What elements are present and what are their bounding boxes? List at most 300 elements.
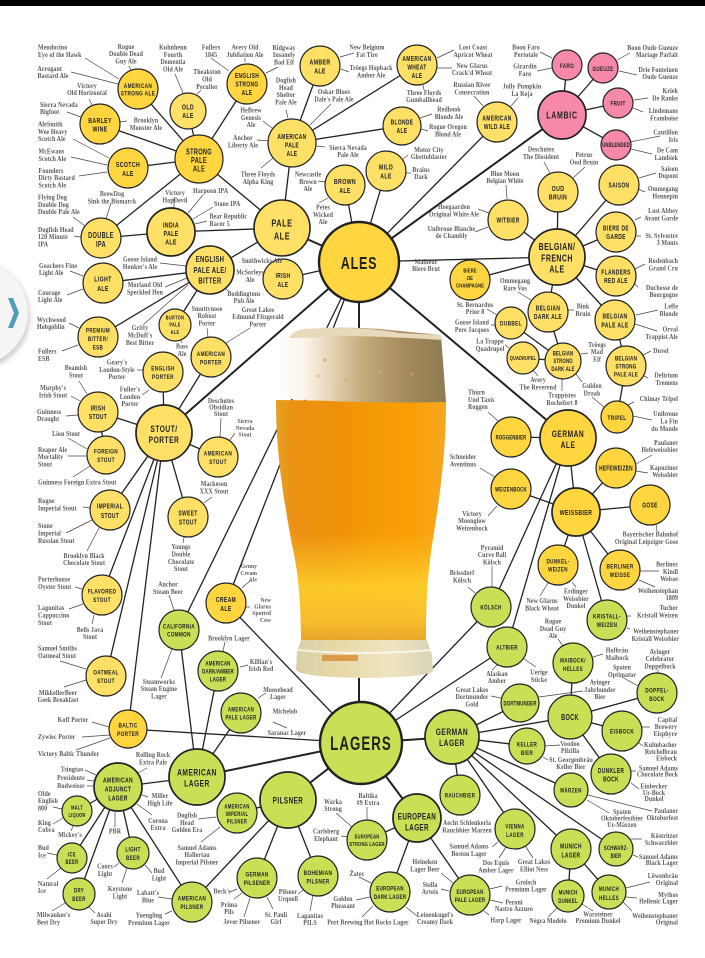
node: Belgian dark ale: DARK ALE — [534, 314, 562, 321]
beer labels: ale side upper left: Goachers Fine — [39, 263, 77, 270]
beer labels: wheat and bock right side: Gold — [466, 701, 479, 709]
node: English strong ale: ENGLISH — [235, 73, 259, 80]
node: Blonde ale: ALE — [397, 128, 407, 135]
node: Oud bruin: OUD — [552, 185, 564, 193]
node: German lager: LAGER — [439, 738, 465, 748]
node: Strong pale ale — [175, 135, 223, 183]
beer labels: lager side lower right: Mythos — [658, 892, 678, 899]
beer labels: ale side upper centre: Petes — [316, 204, 330, 212]
node: English pale ale / bitter: PALE ALE/ — [194, 265, 226, 275]
node: Unblended — [601, 130, 631, 160]
node: American dark / amber lager — [198, 651, 238, 691]
beer labels: Belgian and German ale right side: Bink — [577, 303, 590, 311]
node: Biere de champagne — [450, 260, 490, 300]
beer labels: ale side left middle: Cappuccino — [38, 612, 69, 620]
node: Foreign stout: STOUT — [97, 457, 115, 464]
node: Schwarzbier — [599, 832, 633, 866]
beer labels: ale side left middle: Morland Old — [128, 282, 163, 289]
node: Double IPA: DOUBLE — [88, 232, 114, 240]
node: Oatmeal stout: STOUT — [97, 678, 115, 685]
node: American pilsner: PILSNER — [180, 904, 204, 911]
node: Malt liquor: LIQUOR — [69, 812, 86, 819]
beer labels: Belgian and German ale right side: Blue Moon — [491, 171, 520, 178]
beer labels: ale side left middle: Oyster Stout — [38, 584, 72, 591]
beer labels: ale side left middle: Reaper Ale — [38, 447, 67, 454]
node: Hefeweizen: HEFEWEIZEN — [599, 466, 633, 473]
node: Biere de garde: BIERE DE — [603, 226, 629, 233]
beer labels: Belgian and German ale right side: Mad — [591, 349, 603, 356]
node: Oatmeal stout — [86, 656, 126, 696]
node: German ale — [540, 410, 596, 466]
beer labels: ale side upper centre: Ridgway — [272, 45, 296, 52]
beer labels: ale side upper centre: Porter — [198, 320, 216, 328]
beer labels: ale side left middle: Bass — [176, 343, 188, 351]
node: Irish stout — [78, 392, 118, 432]
beer labels: Belgian and German ale right side: Avery — [530, 377, 546, 384]
node: American pilsner — [172, 882, 212, 922]
node: German pilsener: PILSENER — [244, 880, 271, 887]
beer labels: ale side upper left: Mendocino — [38, 44, 67, 52]
beer labels: lager side lower left: Labatt's — [137, 890, 159, 897]
node: Dunkelweizen — [538, 545, 578, 585]
beer labels: ale side upper centre: HeBrew — [240, 107, 262, 115]
node: Weizenbock — [491, 469, 531, 509]
beer labels: ale side left middle: Steam Engine — [141, 686, 177, 693]
beer labels: ale side left middle: Killian's — [250, 659, 273, 666]
node: India pale ale: INDIA — [163, 222, 179, 230]
beer labels: ale side left middle: Oatmeal Stout — [38, 653, 77, 660]
node: American porter: PORTER — [200, 360, 222, 367]
beer labels: lager side lower left: Zywiec Porter — [38, 734, 75, 741]
node: Cream ale: CREAM — [216, 596, 236, 604]
node: Berliner Weisse — [600, 550, 640, 590]
beer labels: wheat and bock right side: Bier — [594, 694, 606, 701]
node: American pale lager: AMERICAN — [228, 707, 254, 714]
beer labels: ale side upper centre: Newcastle — [295, 171, 321, 179]
beer labels: ale side upper centre: Rogue Oregon — [429, 124, 467, 131]
main branch connectors — [72, 65, 657, 902]
node: Gose — [630, 485, 670, 525]
node: Sweet stout: STOUT — [179, 520, 197, 527]
node: Flanders red ale — [596, 256, 636, 296]
node: American dark / amber lager: LAGER — [210, 677, 226, 684]
beer labels: lager side lower centre: Stella — [423, 882, 438, 889]
node: Belgian dark ale: BELGIAN — [536, 306, 560, 313]
node: Imperial stout: STOUT — [101, 513, 119, 520]
node: Premium bitter / ESB — [78, 317, 118, 357]
node: American stout: AMERICAN — [204, 451, 232, 458]
beer labels: lager side lower right: Oktoberfestbier — [601, 815, 643, 823]
node: Amber ale: ALE — [314, 68, 326, 76]
beer labels: lager side lower centre: Aecht Schlenkerla — [443, 820, 492, 827]
beer labels: lager side lower right: Weihenstephaner — [632, 913, 678, 920]
beer labels: Belgian and German ale right side: Tröegs — [588, 342, 606, 349]
node: Light beer — [117, 837, 149, 869]
beer labels: Belgian and German ale right side: Orval — [663, 326, 678, 334]
node: Imperial stout: IMPERIAL — [97, 504, 123, 511]
beer labels: ale side left middle: Stone — [38, 523, 53, 530]
beer labels: ale side upper centre: Malheur — [415, 259, 437, 266]
node: Double IPA — [81, 218, 121, 258]
node: Light beer: LIGHT — [125, 847, 141, 854]
beer labels: Belgian and German ale right side: Deschutes — [528, 146, 555, 154]
beer labels: Belgian and German ale right side: Lindemans — [649, 108, 678, 115]
beer labels: lager side lower left: Keystone — [108, 886, 132, 893]
beer labels: lager side lower left: King — [38, 820, 52, 827]
node: Keller bier — [509, 728, 545, 764]
beer labels: Belgian and German ale right side: Rochefort 8 — [547, 400, 578, 407]
beer labels: lager side lower centre: Creamy Dark — [417, 919, 453, 926]
node: Altbier: ALTBIER — [496, 645, 518, 652]
node: European strong lager: STRONG LAGER — [349, 841, 385, 848]
beer labels: lager side lower left: Presidente — [57, 775, 85, 782]
beer labels: lager side lower left: PBR — [109, 828, 121, 836]
node: American dark / amber lager: AMERICAN — [205, 661, 231, 668]
node: American stout: STOUT — [209, 459, 227, 466]
beer labels: wheat and bock right side: Weihenstephaner — [633, 628, 679, 636]
beer labels: lager side lower right: Samuel Adams — [639, 854, 678, 861]
node: American strong ale: AMERICAN — [124, 83, 152, 90]
beer labels: Belgian and German ale right side: De Ranke — [652, 95, 678, 103]
node: Kolsch — [471, 587, 511, 627]
beer labels: lager side lower right: Black Lager — [646, 860, 678, 867]
beer glass photo illustration — [276, 328, 446, 678]
node: Bohemian pilsner: PILSNER — [306, 879, 330, 886]
beer labels: lager side lower right: Capital — [658, 717, 677, 724]
node: Belgian strong dark ale — [545, 343, 581, 379]
node: American imperial pilsner: IMPERIAL — [226, 811, 248, 818]
beer labels: Belgian and German ale right side: Elf — [593, 356, 602, 364]
beer labels: lager side lower right: Hellenic Lager — [639, 898, 678, 906]
beer labels: ale side upper left: Scotch Ale — [38, 156, 66, 163]
node: Mild ale: MILD — [379, 164, 393, 172]
beer labels: ale side upper left: Victory — [77, 83, 97, 90]
beer labels: wheat and bock right side: Und Taxis — [468, 397, 495, 404]
node: Irish ale — [263, 259, 303, 299]
node: Quadrupel: QUADRUPEL — [510, 355, 536, 362]
beer labels: Belgian and German ale right side: Ommegang — [648, 186, 679, 193]
beer labels: lager side lower centre: Pilsner — [279, 889, 297, 896]
beer labels: ale side left middle: Irish Stout — [39, 392, 68, 400]
node: Foreign stout — [87, 436, 125, 474]
node: American adjunct lager: ADJUNCT — [105, 786, 131, 794]
beer labels: ale side upper left: Light Ale — [39, 270, 64, 277]
beer labels: ale side upper centre: Bad Elf — [274, 59, 295, 67]
node: Stout / Porter — [136, 405, 192, 461]
node: Eisbock: EISBOCK — [610, 729, 634, 736]
beer labels: lager side lower right: Warsteiner — [583, 911, 613, 919]
beer labels: ale side upper centre: Edmund Fitzgerald — [232, 314, 284, 321]
beer labels: lager side lower left: Samuel Adams — [177, 845, 217, 852]
leader lines from beers to styles — [47, 50, 660, 917]
beer labels: ale side upper centre: Dale's Pale Ale — [314, 96, 354, 104]
beer labels: lager side lower right: Peroni — [505, 899, 523, 907]
node: European dark lager — [370, 872, 410, 912]
node: Biere de garde: GARDE — [606, 234, 626, 241]
beer labels: lager side lower right: Premium Dunkel — [575, 918, 621, 925]
node: Roggenbier: ROGGENBIER — [496, 435, 526, 442]
beer labels: lager side lower right: Grolsch — [516, 879, 537, 887]
beer labels: lager side lower right: Negra Modelo — [529, 918, 567, 925]
beer labels: Belgian and German ale right side: Avant Garde — [644, 215, 678, 223]
beer labels: ale side upper left: Bastard Ale — [38, 73, 68, 80]
node: Light ale: ALE — [97, 285, 109, 293]
node: Ice beer — [57, 843, 87, 873]
node: ALES: ALES — [341, 254, 377, 274]
beer labels: ale side upper centre: Amber Ale — [357, 72, 385, 80]
beer labels: lager side lower right: Löwenbräu — [648, 873, 678, 880]
beer labels: lager side lower right — [478, 717, 679, 927]
beer labels: lager side lower centre: St. Pauli — [265, 912, 287, 919]
node: American wheat ale — [397, 45, 437, 85]
beer labels: ale side upper left: HopDevil — [163, 197, 188, 205]
beer labels: ale side upper left — [38, 44, 247, 277]
beer labels: ale side upper left: BrewDog — [100, 191, 125, 198]
beer labels: ale side upper centre: Ale — [304, 186, 312, 193]
beer labels: ale side upper left: Brooklyn — [134, 117, 158, 125]
beer labels: Belgian and German ale right side: Jolly Pumpkin — [503, 83, 542, 91]
beer labels: lager side lower centre: Pheasant — [331, 903, 356, 910]
node: Vienna lager: LAGER — [506, 832, 524, 839]
node: Dry beer — [63, 878, 95, 910]
beer labels: Belgian and German ale right side: Duvel — [653, 348, 669, 355]
beer labels: wheat and bock right side: Pyramid — [481, 545, 504, 552]
node: American lager: LAGER — [184, 778, 210, 789]
node: German lager — [425, 710, 479, 764]
node: Strong pale ale: STRONG — [186, 149, 212, 157]
beer labels: wheat and bock right side: Moonglow — [458, 518, 486, 525]
beer labels: lager side lower left: Imperial Pilsner — [175, 859, 219, 867]
beer labels: ale side left middle: Guinness Foreign Extra Stout — [38, 479, 117, 487]
beer labels: ale side left middle: Moosehead — [263, 687, 293, 694]
beer labels: lager side lower right: Dos Equis — [483, 860, 510, 867]
beer labels: Belgian and German ale right side: Lambiek — [655, 155, 678, 162]
node: Maibock / Helles: MAIBOCK/ — [560, 658, 586, 665]
node: Maibock / Helles — [553, 643, 593, 683]
beer labels: lager side lower centre: Baltika — [358, 793, 378, 800]
node: Kolsch: KÖLSCH — [480, 604, 502, 612]
beer labels: ale side left middle: Brooklyn Black — [64, 553, 105, 560]
beer labels: lager side lower centre: Žatec — [350, 870, 364, 878]
node: Belgian pale ale — [595, 300, 635, 340]
beer labels: Belgian and German ale right side: Oud Bruin — [570, 159, 599, 167]
node: Bohemian pilsner: BOHEMIAN — [304, 870, 332, 877]
node: Pilsner — [260, 772, 316, 828]
beer labels: lager side lower left: Corona — [148, 818, 168, 825]
beer labels: Belgian and German ale right side: Pere Jacques — [455, 327, 489, 334]
beer labels: ale side upper centre: Anchor — [233, 135, 253, 142]
beer labels: Belgian and German ale right side: La Fin — [660, 418, 678, 426]
node: Biere de garde — [596, 212, 636, 252]
beer labels: lager side lower right: Einbecker — [641, 783, 667, 791]
beer labels: ale side upper centre: Apricot Wheat — [454, 52, 493, 59]
beer labels: ale side left middle: Hobgoblin — [37, 324, 65, 331]
beer labels: ale side upper centre: Three Floyds — [241, 171, 276, 179]
node: Cream ale — [206, 583, 246, 623]
beer labels: ale side upper left: 120 Minute — [38, 234, 68, 241]
beer labels: ale side upper centre: Tröegs Hopback — [349, 65, 393, 72]
node: Cream ale: ALE — [220, 605, 232, 613]
beer labels: ale side upper centre: Gumballhead — [406, 97, 442, 104]
node: Kristallweizen — [587, 600, 627, 640]
beer labels: lager side lower left: Miller — [152, 793, 168, 800]
beer labels: ale side upper left: Eye of the Hawk — [38, 52, 82, 59]
node: English pale ale / bitter — [186, 246, 234, 294]
beer labels: wheat and bock right side: Great Lakes — [456, 687, 489, 694]
beer labels: lager side lower right: Chocolate Bock — [637, 771, 678, 779]
node: American imperial pilsner — [217, 793, 257, 833]
node: Amber ale: AMBER — [310, 59, 330, 67]
beer labels: ale side upper centre: Smuttynose — [192, 306, 222, 313]
beer labels: lager side lower centre: #9 Extra — [357, 800, 380, 807]
beer labels: wheat and bock right side: New Glarus — [526, 598, 558, 605]
node: Dry beer: BEER — [72, 896, 86, 903]
node: Belgian pale ale: PALE ALE — [601, 322, 629, 330]
beer labels: ale side left middle: Chocolate — [168, 559, 194, 566]
node: Gueuze: GUEUZE — [592, 66, 614, 73]
beer labels: ale side upper left: Honker's Ale — [123, 264, 157, 271]
node: Strong pale ale: PALE — [191, 157, 207, 165]
node: Gose: GOSE — [642, 503, 658, 510]
beer labels: lager side lower left: Golden Era — [172, 827, 203, 834]
beer labels: ale side upper left: Theakston — [193, 69, 221, 76]
node: English porter: PORTER — [152, 374, 174, 381]
beer labels: ale side upper left: Wee Heavy — [38, 129, 68, 136]
beer labels: Belgian and German ale right side: Delirium — [654, 372, 679, 380]
node: English pale ale / bitter: ENGLISH — [196, 254, 224, 264]
node: Blonde ale: BLONDE — [391, 120, 413, 127]
beer labels: ale side left middle: Porter — [121, 401, 139, 408]
beer labels: wheat and bock right side: Dunkel — [566, 603, 586, 610]
node: English pale ale / bitter: BITTER — [198, 275, 222, 286]
node: Irish stout: STOUT — [89, 414, 107, 421]
beer labels: ale side upper centre: New Glarus — [456, 63, 488, 70]
beer labels: ale side left middle: Lagunitas — [38, 605, 65, 612]
node: Marzen: MÄRZEN — [560, 787, 582, 795]
beer labels: lager side lower right: Köstritzer — [651, 833, 678, 840]
beer labels: lager side lower left — [37, 734, 261, 927]
beer labels: wheat and bock right side: Kindl — [663, 569, 678, 576]
beer labels: lager side lower right: Keller Bier — [556, 764, 586, 771]
node: American adjunct lager: AMERICAN — [103, 777, 133, 785]
beer labels: ale side upper centre: Brown — [299, 179, 317, 186]
node: Schwarzbier: SCHWARZ- — [604, 845, 628, 852]
beer labels: Belgian and German ale right side: Dupont — [658, 173, 679, 180]
node: Belgian strong dark ale: STRONG — [553, 358, 573, 365]
beer labels: Belgian and German ale right side: Unibroue — [653, 411, 678, 418]
node: Dunkelweizen: DUNKEL- — [547, 559, 569, 566]
node: Premium bitter / ESB: PREMIUM — [86, 328, 110, 335]
beer labels: ale side upper centre: Porter — [249, 321, 267, 329]
node: LAGERS — [320, 702, 402, 784]
beer labels: ale side upper centre: Ale — [247, 122, 255, 129]
beer labels: ale side upper left: AleSmith — [38, 121, 63, 129]
beer labels: ale side left middle: Steam Beer — [153, 589, 183, 596]
beer labels: wheat and bock right side: Alaskan — [486, 671, 508, 678]
node: Biere de champagne: DE — [467, 275, 473, 282]
node: Biere de champagne: BIERE — [463, 268, 477, 275]
node: American lager: AMERICAN — [177, 767, 217, 778]
beer labels: ale side left middle: London-Style — [99, 367, 135, 374]
beer labels: lager side lower left: Bud — [38, 845, 49, 852]
beer labels: ale side upper left: Flying Dog — [38, 194, 67, 202]
beer labels: ale side upper centre: Head — [279, 85, 293, 92]
beer labels: ale side left middle: Stout — [69, 372, 84, 380]
beer labels: ale side upper centre: Motor City — [414, 147, 444, 154]
node: Double IPA: IPA — [96, 241, 106, 249]
node: Witbier — [488, 200, 528, 240]
beer labels: ale side upper centre: Pale Ale — [275, 99, 297, 107]
beer labels: ale side upper left: Double Dead — [109, 51, 143, 58]
beer labels: ale side upper left: Peculier — [196, 84, 218, 91]
beer labels: wheat and bock right side: Ayinger — [650, 649, 670, 656]
node: Oud bruin — [538, 172, 578, 212]
node: Flavored stout — [82, 575, 122, 615]
beer labels: lager side lower centre: Girl — [271, 919, 282, 926]
node: Belgian / French ale: FRENCH — [541, 252, 573, 264]
node: Rauchbier: RAUCHBIER — [445, 793, 475, 800]
beer labels: Belgian and German ale right side — [455, 44, 679, 479]
node: Pale ale: PALE — [271, 217, 293, 229]
beer labels: lager side lower right: Original — [656, 880, 678, 887]
beer labels: lager side lower right: Paulaner — [654, 808, 678, 815]
beer labels: Belgian and German ale right side: Oude Gueuze — [642, 74, 678, 81]
beer labels: lager side lower left: Ice — [38, 888, 46, 895]
node: Irish stout: IRISH — [91, 406, 105, 413]
beer labels: wheat and bock right side: Sticke — [531, 677, 547, 684]
beer labels: lager side lower right: Original — [656, 919, 678, 927]
beer labels: wheat and bock right side: Celebrator — [646, 656, 674, 663]
beer labels: ale side upper centre: de Chambly — [436, 233, 468, 240]
node: Scotch ale — [108, 148, 148, 188]
beer labels: ale side upper centre: Ghettoblaster — [411, 154, 447, 161]
beer labels: ale side upper left: Dogfish Head — [38, 227, 74, 234]
node: Belgian strong dark ale: DARK ALE — [551, 366, 575, 373]
beer labels: ale side upper left: Fullers — [202, 44, 221, 52]
beer labels: ale side upper left: Guy Ale — [115, 58, 137, 66]
node: American wheat ale: AMERICAN — [402, 56, 432, 63]
beer labels: wheat and bock right side: Kristall Weissbier — [632, 636, 679, 643]
beer labels: ale side left middle: Stout — [38, 461, 53, 469]
node: Hefeweizen — [596, 448, 636, 488]
beer labels: ale side left middle: Sierra — [237, 419, 253, 425]
beer labels: ale side upper left: Bear Republic — [209, 213, 247, 221]
node: Mild ale: ALE — [380, 173, 392, 181]
beer labels: lager side lower centre: Carlsberg — [313, 828, 340, 836]
beer labels: Belgian and German ale right side: Boon Faro — [512, 44, 540, 52]
node: California common: COMMON — [167, 632, 191, 639]
node: American pale ale: PALE — [285, 143, 299, 150]
beer labels: wheat and bock right side: Aventinus — [450, 461, 476, 469]
node: Oud bruin: BRUIN — [549, 194, 567, 202]
beer labels: ale side upper left: Bigfoot — [40, 109, 60, 116]
node: Munich helles — [592, 875, 626, 909]
node: Marzen — [554, 773, 588, 807]
beer labels: lager side lower left: Tsingtao — [61, 766, 83, 774]
beer labels: lager side lower left: Light — [152, 875, 167, 883]
node: Fruit: FRUIT — [610, 101, 626, 108]
beer labels: Belgian and German ale right side: The Reverend — [520, 384, 557, 392]
beer labels: Belgian and German ale right side: Bruin — [575, 311, 591, 318]
beer labels: ale side left middle: Stout — [214, 411, 229, 418]
beer labels: ale side upper left: Racer 5 — [209, 221, 230, 228]
beer labels: Belgian and German ale right side: La Roja — [511, 91, 533, 98]
beer labels: ale side left middle: Saranac Lager — [268, 730, 306, 737]
beer labels: wheat and bock right side: 1809 — [666, 595, 679, 602]
node: Scotch ale: SCOTCH — [116, 161, 140, 169]
beer labels: ale side upper centre: Robust — [198, 313, 217, 320]
beer labels: lager side lower right: Voodoo — [560, 741, 580, 748]
